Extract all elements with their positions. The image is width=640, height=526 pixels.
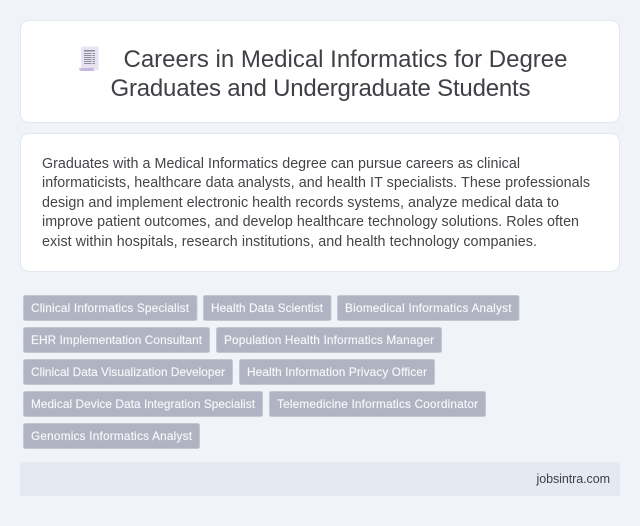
tag: Clinical Data Visualization Developer bbox=[24, 360, 232, 384]
title bbox=[110, 46, 568, 102]
footer bbox=[20, 462, 620, 496]
tag: EHR Implementation Consultant bbox=[24, 328, 210, 352]
panel: title card bbox=[20, 20, 620, 122]
title: Graduates and Undergraduate Students bbox=[110, 75, 530, 102]
tag: Telemedicine Informatics Coordinator bbox=[270, 392, 486, 416]
tag: Telemedicine Informatics Coordinator: Telemedicine Informatics Coordinator bbox=[277, 397, 478, 411]
description text: improve patient outcomes, and develop healthcare technology solutions. Roles often bbox=[42, 214, 579, 230]
tag: Health Data Scientist: Health Data Scientist bbox=[211, 301, 324, 315]
icon: document scroll bbox=[79, 46, 98, 71]
tag: Health Data Scientist bbox=[204, 296, 331, 320]
footer text: source: jobsintra.com bbox=[536, 472, 610, 486]
description text: informaticists, healthcare data analysts, and health IT specialists. These professionals bbox=[42, 175, 590, 191]
tag: Population Health Informatics Manager bbox=[216, 328, 442, 352]
job tags bbox=[24, 296, 519, 448]
description text bbox=[42, 156, 590, 250]
tag: Health Information Privacy Officer bbox=[240, 360, 434, 384]
title: Careers in Medical Informatics for Degree bbox=[124, 46, 568, 73]
description text: Graduates with a Medical Informatics degree can pursue careers as clinical bbox=[42, 156, 520, 172]
tag: EHR Implementation Consultant: EHR Implementation Consultant bbox=[31, 333, 203, 347]
description text: exist within hospitals, research institutions, and health technology companies. bbox=[42, 234, 537, 250]
tag: Medical Device Data Integration Specialist: Medical Device Data Integration Specialist bbox=[31, 397, 256, 411]
tag: Biomedical Informatics Analyst: Biomedical Informatics Analyst bbox=[345, 301, 512, 315]
tag: Clinical Informatics Specialist: Clinical Informatics Specialist bbox=[31, 301, 190, 315]
tag: Population Health Informatics Manager: Population Health Informatics Manager bbox=[224, 333, 434, 347]
tag: Clinical Data Visualization Developer: Clinical Data Visualization Developer bbox=[31, 365, 225, 379]
description text: design and implement electronic health records systems, analyze medical data to bbox=[42, 195, 559, 211]
panel: description bbox=[20, 134, 620, 272]
tag: Biomedical Informatics Analyst bbox=[338, 296, 519, 320]
tag: Medical Device Data Integration Specialist bbox=[24, 392, 262, 416]
tag: Genomics Informatics Analyst bbox=[24, 424, 200, 448]
tag: Health Information Privacy Officer: Health Information Privacy Officer bbox=[247, 365, 427, 379]
tag: Genomics Informatics Analyst: Genomics Informatics Analyst bbox=[31, 429, 193, 443]
tag: Clinical Informatics Specialist bbox=[24, 296, 197, 320]
